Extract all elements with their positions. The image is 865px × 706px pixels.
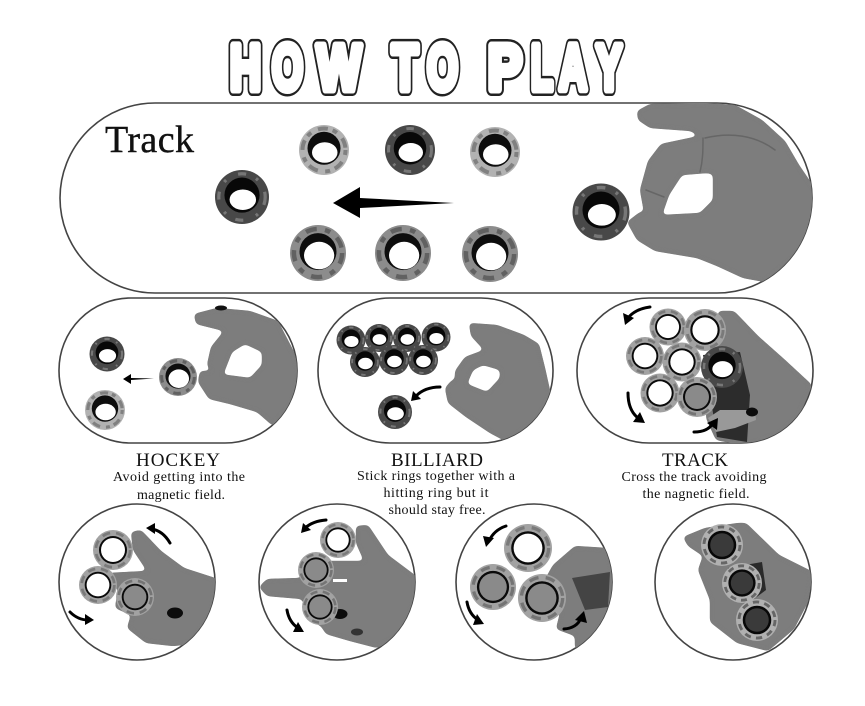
rings — [85, 336, 197, 430]
title — [230, 32, 622, 104]
title: P — [488, 32, 522, 104]
panel: billiard — [318, 298, 553, 443]
panel: track game — [577, 298, 813, 446]
hand — [194, 306, 300, 426]
circle outline — [456, 504, 612, 660]
caption: track — [622, 450, 766, 502]
hand — [445, 323, 551, 442]
step circle 3 — [456, 504, 616, 660]
step circle 2 — [259, 504, 416, 660]
caption: billiard: should stay free. — [388, 503, 486, 518]
title: T — [392, 32, 418, 104]
curved arrows — [287, 520, 326, 632]
title: L — [531, 32, 553, 104]
panel outline — [59, 298, 297, 443]
curved arrows — [70, 523, 170, 625]
panel: hockey — [59, 298, 300, 443]
title: Y — [596, 32, 622, 104]
panel: track overview — [60, 103, 816, 293]
ring held by the hand — [572, 184, 630, 240]
title: O — [272, 32, 303, 104]
rings — [626, 308, 743, 417]
rings — [79, 530, 154, 616]
hand — [683, 523, 813, 651]
caption: billiard — [357, 450, 516, 518]
hand — [547, 546, 612, 648]
title: H — [230, 32, 261, 104]
title: T — [392, 32, 418, 104]
circle outline — [259, 504, 415, 660]
panel outline — [60, 103, 812, 293]
caption: track: the nagnetic field. — [642, 487, 750, 502]
rings — [470, 524, 566, 622]
rings — [701, 524, 778, 641]
panel outline — [318, 298, 553, 443]
title: A — [559, 32, 587, 104]
caption: hockey: Avoid getting into the — [113, 470, 245, 485]
caption: billiard: BILLIARD — [391, 450, 483, 471]
hand — [259, 525, 416, 648]
caption: hockey: HOCKEY — [136, 450, 220, 471]
rings in the track formation — [215, 125, 520, 282]
caption: track: TRACK — [662, 450, 728, 471]
hand — [108, 530, 218, 646]
hand — [701, 311, 812, 446]
title: Y — [596, 32, 622, 104]
step circle 1 — [59, 504, 218, 660]
rack of rings — [336, 322, 450, 377]
title: H — [230, 32, 261, 104]
arrow pointing left — [333, 187, 454, 218]
title: A — [559, 32, 587, 104]
curved arrows — [623, 307, 718, 432]
caption: hockey: magnetic field. — [137, 488, 225, 503]
caption: track: Cross the track avoiding — [622, 470, 766, 485]
curved arrow — [411, 387, 440, 401]
circle outline — [59, 504, 215, 660]
title: O — [427, 32, 458, 104]
title: P — [488, 32, 522, 104]
heading: Track: Track — [105, 119, 194, 161]
title: O — [427, 32, 458, 104]
panel outline — [577, 298, 813, 443]
curved arrows — [467, 526, 587, 629]
caption: billiard: hitting ring but it — [384, 486, 489, 501]
title: W — [317, 32, 361, 104]
arrow — [123, 374, 154, 384]
hitting ring — [378, 395, 412, 429]
rings — [298, 522, 356, 625]
step circle 4 — [655, 504, 813, 660]
caption: billiard: Stick rings together with a — [357, 469, 516, 484]
hand flicking the ring — [627, 103, 816, 282]
title: W — [317, 32, 361, 104]
circle outline — [655, 504, 811, 660]
title: O — [272, 32, 303, 104]
caption: hockey — [113, 450, 245, 503]
title: L — [531, 32, 553, 104]
